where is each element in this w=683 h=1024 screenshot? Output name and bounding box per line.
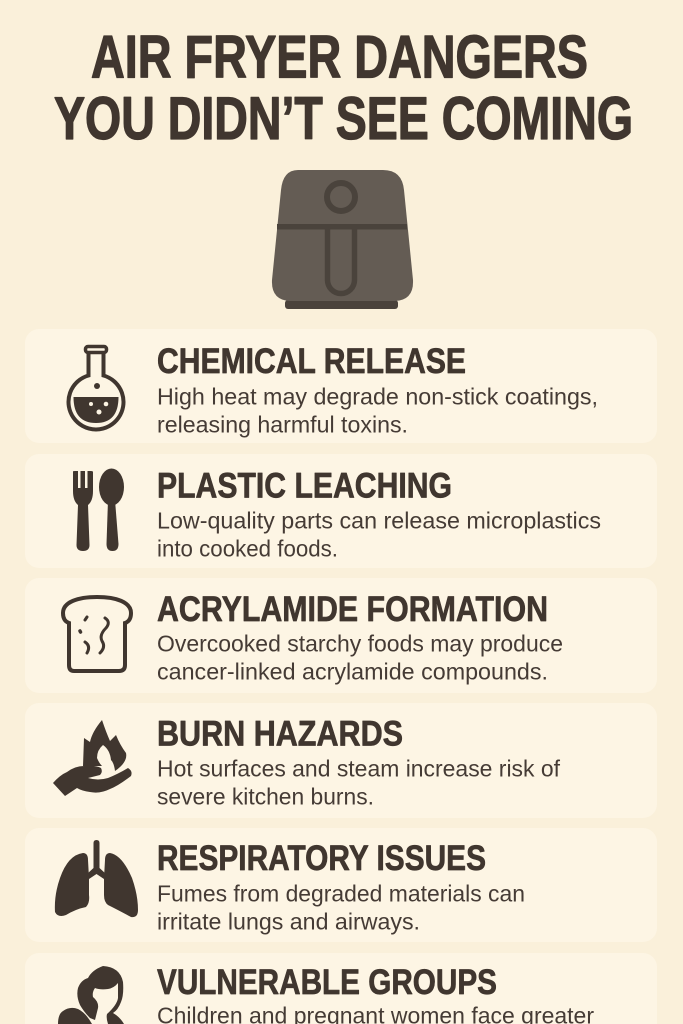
panel: burn hazards [25,703,657,818]
description: Overcooked starchy foods may produce [157,630,563,656]
description: Fumes from degraded materials can [157,880,525,906]
description [157,384,598,438]
heading: RESPIRATORY ISSUES [157,838,486,878]
heading: CHEMICAL RELEASE [157,341,466,381]
description: High heat may degrade non-stick coatings, [157,384,598,410]
icon: fork and spoon [73,468,124,551]
title [54,24,633,152]
icon: bread [63,597,131,671]
panel: acrylamide formation [25,578,657,693]
panel: chemical release [25,329,657,443]
panel: respiratory issues [25,828,657,942]
panel: plastic leaching [25,454,657,568]
description: cancer-linked acrylamide compounds. [157,658,548,684]
description: releasing harmful toxins. [157,412,408,438]
description: severe kitchen burns. [157,784,374,810]
heading: PLASTIC LEACHING [157,466,452,506]
icon: lungs [55,840,138,917]
description [157,630,563,684]
description [157,880,525,934]
description [157,756,561,810]
heading: BURN HAZARDS [157,714,403,754]
description [157,508,601,562]
icon: mother and child [58,966,124,1024]
panel: vulnerable groups [25,953,657,1024]
heading: ACRYLAMIDE FORMATION [157,589,548,629]
description: into cooked foods. [157,536,338,562]
description: irritate lungs and airways. [157,908,420,934]
description: Low-quality parts can release microplastics [157,508,601,534]
icon: flask [68,346,124,429]
heading: VULNERABLE GROUPS [157,962,497,1002]
icon: hand with flame [53,720,132,796]
description: Hot surfaces and steam increase risk of [157,756,561,782]
icon: air fryer [272,170,413,309]
